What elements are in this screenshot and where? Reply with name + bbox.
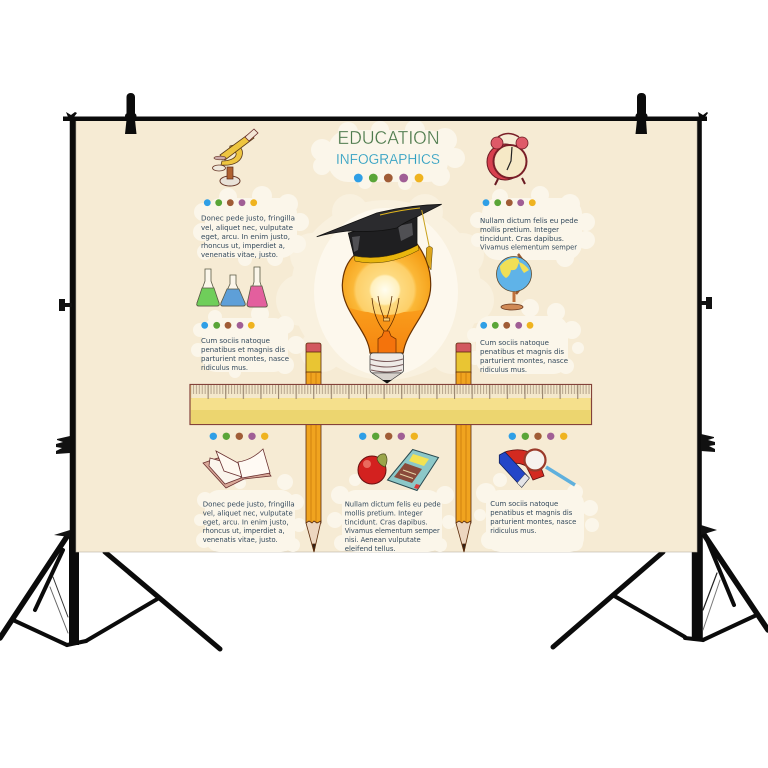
graduation cap [317, 204, 442, 270]
icon: alarm clock [487, 134, 528, 185]
text: top left: venenatis vitae, justo. [201, 250, 278, 259]
text: second right: ridiculus mus. [480, 365, 527, 374]
dots: top right [483, 199, 536, 206]
text: bottom left: Donec pede justo, fringilla [203, 500, 295, 508]
icon: apple [358, 454, 387, 484]
pencil: right [456, 343, 471, 552]
icon: magnet and magnifier [499, 450, 575, 487]
cloud: bottom middle text [327, 474, 456, 552]
light bulb [340, 240, 434, 384]
text: bottom middle: Nullam dictum felis eu pede [345, 500, 441, 508]
cloud: top right text [470, 186, 595, 267]
pencil: left [306, 343, 321, 552]
top crossbar and clips [63, 93, 708, 134]
title dots [354, 174, 423, 182]
text: bottom middle: tincidunt. Cras dapibus. [345, 518, 428, 526]
text: bottom right [490, 499, 577, 535]
text: top left: eget, arcu. In enim justo, [201, 232, 290, 241]
title: INFOGRAPHICS [336, 152, 440, 168]
dots: top left [204, 199, 257, 206]
text: top left: rhoncus ut, imperdiet a, [201, 241, 285, 250]
text: second right: parturient montes, nasce [480, 356, 569, 365]
dots: bottom right [509, 433, 567, 440]
dots: bottom left [210, 433, 268, 440]
cloud: second right text [467, 299, 584, 374]
text: bottom left: vel, aliquet nec, vulputate [203, 508, 293, 518]
cloud: top left text [193, 186, 309, 266]
text: bottom middle [345, 500, 441, 553]
title: EDUCATION [338, 127, 440, 148]
text: top right: mollis pretium. Integer [480, 225, 559, 234]
cloud: title [311, 120, 465, 190]
text: bottom left: rhoncus ut, imperdiet a, [203, 526, 285, 535]
text: top right: Vivamus elementum semper [480, 242, 577, 252]
text: bottom middle: eleifend tellus. [345, 544, 396, 553]
right light stand [553, 118, 768, 647]
cloud: bottom left text [194, 474, 306, 552]
dots: bottom middle [359, 433, 418, 440]
text: bottom left: venenatis vitae, justo. [203, 535, 278, 544]
icon: globe [496, 254, 532, 310]
cloud: bottom right text [474, 473, 599, 552]
banner background [76, 118, 697, 552]
icon: open book [203, 449, 271, 488]
dots: second left [201, 322, 255, 329]
text: second left: parturient montes, nasce [201, 354, 290, 363]
text: second left: Cum sociis natoque [201, 336, 271, 345]
text: second right: Cum sociis natoque [480, 338, 550, 347]
text: top left [201, 214, 295, 259]
icon: microscope [212, 129, 258, 186]
left light stand [0, 118, 220, 649]
text: second right [480, 338, 569, 374]
icon: calculator [388, 450, 438, 490]
text: second left: ridiculus mus. [201, 363, 248, 372]
text: bottom middle: Vivamus elementum semper [345, 526, 440, 535]
text: top right [480, 216, 579, 252]
dots: second right [480, 322, 533, 329]
text: bottom middle: nisi. Aenean vulputate [345, 535, 421, 544]
text: second left [201, 336, 290, 372]
text: second right: penatibus et magnis dis [480, 347, 564, 356]
text: top right: tincidunt. Cras dapibus. [480, 234, 564, 243]
background cloud shapes [191, 120, 599, 552]
text: top left: vel, aliquet nec, vulputate [201, 223, 294, 232]
text: bottom left: eget, arcu. In enim justo, [203, 518, 289, 526]
title [336, 127, 440, 168]
text: bottom left [203, 500, 295, 544]
text: bottom right: Cum sociis natoque [490, 499, 559, 508]
ruler [190, 384, 592, 424]
text: top left: Donec pede justo, fringilla [201, 214, 295, 222]
icon: flasks [197, 267, 267, 307]
text: top right: Nullam dictum felis eu pede [480, 216, 579, 225]
cloud: second left text [191, 305, 305, 378]
text: bottom right: parturient montes, nasce [490, 517, 577, 526]
text: bottom right: ridiculus mus. [490, 526, 536, 535]
text: bottom middle: mollis pretium. Integer [345, 508, 423, 518]
text: bottom right: penatibus et magnis dis [490, 508, 573, 517]
text: second left: penatibus et magnis dis [201, 345, 285, 354]
